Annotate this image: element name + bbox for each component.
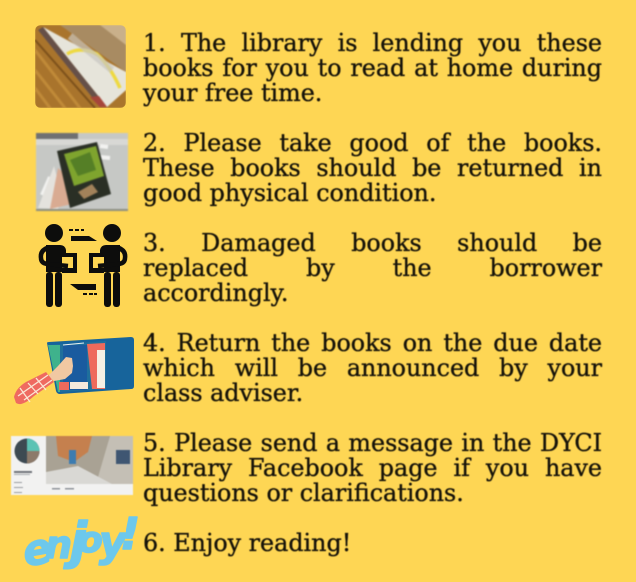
text block: rule 3: accordingly. [143, 279, 288, 307]
text block: rule 3: replaced by the borrower [143, 254, 602, 282]
illustrations column [10, 25, 140, 576]
photo: stack of books on a table [35, 25, 126, 108]
text block: rule 1: your free time. [143, 79, 322, 107]
text block: rule 2: These books should be returned in [143, 154, 602, 182]
text block: rule 5 [143, 429, 602, 507]
text block: rule 5: Library Facebook page if you have [143, 454, 602, 482]
icon: two people exchanging books [41, 224, 125, 307]
icon: hand taking a book from a shelf [14, 337, 134, 404]
text block: rule 4: 4. Return the books on the due date [143, 329, 602, 357]
lettering: enjoy!: j [63, 512, 88, 570]
text block: rule 5: 5. Please send a message in the DYCI [143, 429, 602, 457]
text block: rule 5: questions or clarifications. [143, 479, 464, 507]
text block: rule 1: 1. The library is lending you these [143, 29, 602, 57]
text block: rule 2: 2. Please take good of the books. [143, 129, 602, 157]
lettering: enjoy!: n [45, 523, 72, 567]
lettering: enjoy!: ! [120, 509, 140, 560]
lettering: enjoy!: e [19, 523, 55, 576]
text block: rule 3: 3. Damaged books should be [143, 229, 602, 257]
photo: hand holding a green book [36, 133, 128, 211]
lettering: enjoy! [19, 509, 140, 576]
text block: rule 2: good physical condition. [143, 179, 436, 207]
lettering: enjoy!: y [99, 517, 128, 566]
text block: rule 3 [142, 229, 603, 308]
text block: rule 6: 6. Enjoy reading! [143, 529, 351, 557]
text block: rule 1: books for you to read at home during [143, 54, 602, 82]
text block: rule 2 [142, 129, 602, 208]
text block: rule 4: class adviser. [143, 379, 303, 407]
screenshot: Facebook page [11, 436, 133, 495]
lettering: enjoy!: o [78, 520, 103, 561]
text block: rule 4 [142, 329, 603, 407]
text block: rule 4: which will be announced by your [143, 354, 602, 382]
text block: rule 1 [142, 29, 602, 108]
